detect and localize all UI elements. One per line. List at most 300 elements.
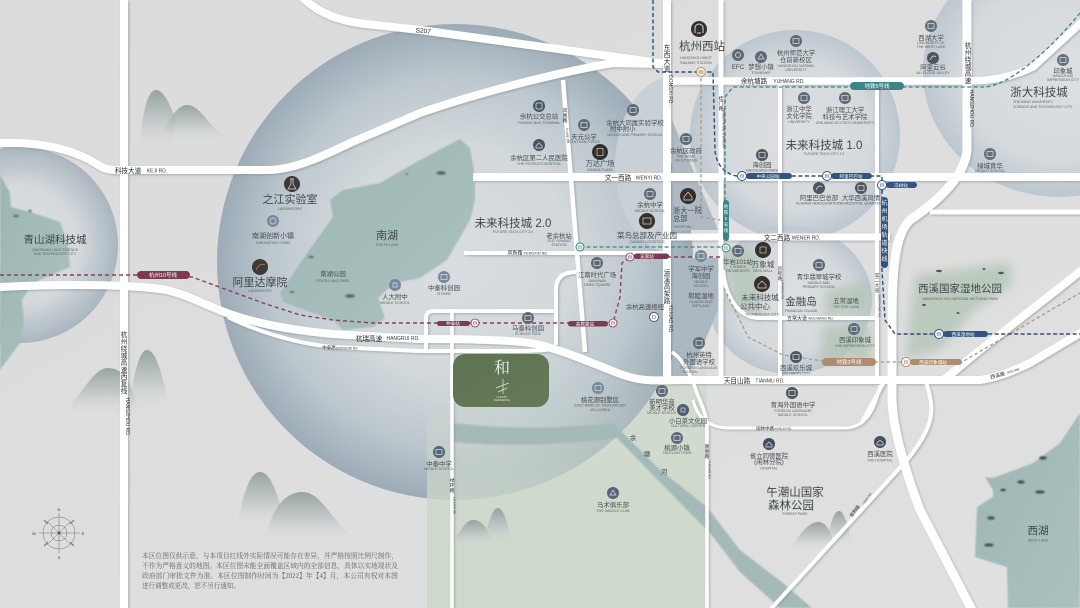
metro pills and stations: 5 (725, 216, 728, 221)
poi: Taoyuan town: TAOYUAN TOWN (663, 451, 692, 455)
poi: Qinghua Feicui school: 青华翡翠城学校 (797, 272, 842, 281)
road labels: 高 (664, 282, 671, 291)
poi: innovation town (252, 215, 294, 245)
poi: Zhijiang lab: LABORATORY (278, 207, 303, 211)
district: Zheda tech city (1010, 85, 1073, 109)
metro pills and stations: 高教路站 (576, 320, 595, 328)
poi: Zhejiang Sci-Tech college: ZHEJIANG SCI-TECH UNIVERSITY (816, 121, 875, 125)
project marker: LUXURY (496, 395, 508, 399)
poi: Ali cloud valley: 阿里云谷 (920, 62, 946, 72)
poi: Dahua Xixi: 大华西溪风情 (842, 193, 881, 202)
wetland patches (728, 250, 1012, 362)
poi: Renda middle school: 人大附中 (382, 292, 408, 301)
poi: Zhongtai science park: SI PARK (437, 292, 452, 296)
metro pills and stations: 地铁3号线 (836, 358, 862, 366)
poi: Xiaobaicai cultural park (669, 404, 707, 428)
road labels: HANGZHOU RD. (968, 90, 974, 128)
metro pills and stations: m (880, 183, 884, 189)
metro: teal dashed (580, 13, 1080, 247)
poi: Taohuayuan villas: EAST WING OF TAOHUAYUAN (574, 404, 626, 408)
label: South Lake: 南湖 (376, 229, 398, 242)
road labels: DONGXI RD. (667, 75, 673, 105)
poi: South Lake Park: 南湖公园 (320, 269, 346, 278)
poi: Xiaobaicai cultural park: CULTURAL CENTER (671, 424, 706, 428)
metro pills and stations: 线 (881, 255, 888, 263)
poi: Tongde hospital: 省立同德医院 (750, 451, 789, 460)
metro pills and stations: 杭 (881, 199, 888, 207)
poi: Zheda first hospital (673, 188, 702, 229)
metro pills and stations: 线 (724, 227, 729, 233)
road labels: 闲林中路 (756, 425, 774, 432)
poi: Datong experimental school: 余杭大同属实验学校 (606, 118, 664, 127)
road labels: 绕 (121, 344, 128, 353)
poi: Yuhai foreign language: MIDDLE SCHOOL (778, 413, 808, 417)
poi: Zhongtai science park: 中泰科创园 (428, 283, 460, 292)
district: Future Tech City 2.0: FUTURE TECH CITY 2.0 (493, 230, 533, 234)
label: Wuchaoshan forest park (766, 485, 824, 516)
road labels: 路 (664, 296, 671, 305)
road labels: 杭 (965, 41, 972, 50)
road labels: 西溪路 (989, 370, 1006, 381)
poi: Yuhang middle school: MIDDLE SCHOOL (635, 209, 665, 213)
poi: Alibaba headquarters (796, 182, 842, 206)
road labels: 路 (778, 275, 783, 282)
poi: Zhijiang lab: 之江实验室 (262, 192, 318, 206)
poi: Haichuang park (746, 149, 779, 172)
metro: blue dashed (653, 0, 1080, 334)
metro pills and stations: 阿里巴巴站 (840, 173, 863, 180)
road labels: 睦 (778, 270, 783, 276)
road labels: 杭 (121, 330, 128, 339)
poi: Datong experimental school: 附中附小 (610, 124, 636, 133)
disclaimer text: 不作为严格意义的地图。本区位图未能全面覆盖区域内的全部信息，具体以实地现状及 (142, 561, 398, 571)
metro pills and stations: 吴家站 (640, 253, 654, 260)
road labels: FUCHUN RD. (708, 461, 712, 479)
road labels: 西 (121, 373, 128, 381)
metro pills and stations: 州 (881, 208, 888, 215)
label: Wuchaoshan forest park: 森林公园 (768, 498, 814, 512)
poi: Yuhang high-speed hub (626, 302, 665, 322)
green forest area (427, 370, 707, 608)
metro pills and stations: 西溪湿地站 (952, 331, 975, 338)
project marker: RESIDENCE (494, 398, 510, 402)
road labels: FLAME RD. (565, 128, 570, 144)
road labels: 大 (664, 57, 671, 66)
poi: Hangzhou West station (679, 21, 725, 65)
poi: Dahua Xixi (840, 182, 882, 206)
poi: Saddle club: THE SADDLE CLUB (596, 509, 630, 513)
poi: Hangzhou West station: 杭州西站 (679, 39, 725, 53)
poi: Tianyuan school: TIANYUAN FORCE (568, 140, 600, 144)
road labels: 二 (875, 278, 880, 283)
poi: Hemu wetland: WETLAND (692, 304, 710, 308)
compass (32, 507, 85, 560)
poi: Yuhang bus terminal (518, 100, 560, 125)
road labels: 大 (875, 282, 880, 289)
poi: Wanda plaza: 万达广场 (586, 159, 614, 168)
poi: Zhejiang Chinese culture college: 文化学院 (786, 111, 812, 120)
metro pills and stations: 道 (881, 239, 888, 247)
road labels (115, 27, 1021, 519)
label: West Lake: 西湖 (1028, 525, 1048, 537)
poi: Huayan 101: 1 HOMES (730, 265, 747, 269)
poi: South Lake Park: SOUTH LAKE PARK (316, 279, 350, 283)
poi: Wanda plaza (586, 144, 614, 172)
label: Xixi wetland park: 西溪国家湿地公园 (918, 282, 1002, 295)
road labels: LVHUAN RD. (452, 497, 456, 515)
poi: EFC: EFC (732, 64, 745, 71)
road labels: XIXI RD. (1007, 367, 1021, 375)
road labels: 速 (965, 77, 972, 85)
poi: Cainiao headquarters: CAINIAO LOGISTICS (630, 240, 665, 244)
label: West Lake (1028, 525, 1049, 542)
project marker (453, 354, 549, 407)
poi: Qinghua Feicui school: MIDDLE AND (808, 281, 830, 285)
poi: Yuhai foreign language: 育海外国语中学 (771, 400, 816, 409)
poi: Greentown Yuhua: 绿城育华 (977, 161, 1003, 170)
road labels: HANGZHOU RD. (124, 398, 130, 436)
poi: Jiangnan times square: 江南时代广场 (578, 270, 616, 279)
road labels: 门 (719, 100, 724, 107)
poi: Tongde hospital: HOSPITAL (760, 466, 778, 470)
road labels: 凤 (563, 108, 568, 114)
poi: Huayan 101 (723, 245, 754, 273)
poi: Xuejun middle school: SCHOOL (693, 284, 709, 288)
poi: Xuejun middle school: MIDDLE (694, 280, 708, 284)
poi: Dream town: 梦想小镇 (748, 62, 774, 71)
road labels: WUCHANG RD. (808, 316, 834, 320)
poi: Yuhang government (670, 133, 703, 162)
poi: Impression city: 印象城 (1053, 66, 1073, 75)
poi: Foreign language school: FOREIGN LANGUAGE (680, 366, 718, 370)
poi: innovation town: 南湖创新小镇 (252, 231, 294, 240)
poi: South Lake Park (316, 269, 350, 283)
poi: Yuhang government: OF CITIZENS (675, 158, 698, 162)
poi: Zhejiang Sci-Tech college: 科技与艺术学院 (823, 112, 868, 121)
road labels: YUXIAO RD. (667, 305, 673, 333)
poi: Jiangnan times square: TIMES SQUARE (583, 283, 611, 287)
road labels: 东 (664, 43, 671, 52)
district: Zheda tech city: SCIENCE AND TECHNOLOGY CITY (1013, 105, 1073, 109)
metro pills and stations: 轨 (881, 231, 888, 239)
road labels: ZHONGTAI RD. (336, 346, 358, 350)
road labels: S207 (415, 27, 432, 36)
metro pills and stations: 杭州10号线 (149, 271, 178, 279)
poi: Old Yuhang station: STATION (551, 243, 567, 247)
poi: Future tech public center: 未来科技城 (741, 292, 779, 302)
poi: Future tech public center (740, 276, 780, 316)
mountains (60, 90, 852, 550)
poi: Xixi impression city: 西溪印象城 (839, 335, 872, 344)
metro pills and stations: m (698, 70, 704, 76)
poi: Dahua Xixi: HORIZONTAL QUARTER (840, 202, 882, 206)
label: West Lake: WEST LAKE (1028, 538, 1049, 542)
road labels: 线 (121, 386, 128, 395)
green fade over circle (427, 360, 707, 608)
poi: Wuchang wetland: THE FIVE LAND (833, 305, 860, 309)
district: Qingshan Lake: AND TECHNOLOGY CITY (34, 252, 77, 256)
poi: Impression city: HANGZHOU (1053, 74, 1074, 78)
poi: Huayan 101: 华岩101站 (723, 257, 754, 266)
road labels: GREEN ROAD STATION (722, 108, 726, 148)
poi: Renda middle school (380, 279, 410, 305)
poi: Datong experimental school: MIDDLE AND PRIMARY SCHOOL (607, 133, 663, 137)
district: Future Tech City 2.0: 未来科技城 2.0 (475, 216, 551, 230)
poi: Cainiao headquarters: 菜鸟总部及产业园 (617, 230, 677, 240)
poi: Hemu wetland: GUANGLONG (689, 300, 713, 304)
road labels: YUHANG RD. (773, 79, 805, 85)
metro pills and stations: 冯树站 (894, 182, 908, 189)
poi: Science park: 马秦科创园 (512, 324, 544, 332)
poi: Yuhai foreign language (771, 387, 816, 417)
lake: South Lake (280, 139, 475, 330)
poi: Zhongtai middle school: MIDDLE SCHOOL (424, 467, 454, 471)
poi: Science park (512, 312, 544, 336)
poi: Second people's hospital: 余杭区第二人民医院 (510, 153, 568, 162)
label: Xixi wetland park: HANGZHOU XIXI NATIONAL WETLAND PARK (922, 297, 999, 301)
poi: Tongde hospital (750, 438, 789, 470)
metro pills and stations: m (610, 321, 616, 327)
disclaimer text: 政府部门审批文件为准。本区位图制作时间为【2022】年【4】月，本公司有权对本图 (142, 571, 398, 581)
poi: Yuhang high-speed hub: 余杭高速枢纽 (626, 302, 665, 311)
district: Future Tech City 1.0: 未来科技城 1.0 (786, 138, 862, 152)
road labels: 凤新路 (507, 250, 523, 256)
poi: Xiaobaicai cultural park: 小白菜文化园 (669, 416, 707, 425)
metro line: gray-brown dashed (701, 78, 1080, 362)
road labels: 运 (664, 269, 671, 277)
poi: Zhejiang Sci-Tech college: 浙江理工大学 (826, 105, 865, 114)
road labels: 路 (719, 105, 724, 112)
metro pills and stations: m (724, 246, 728, 252)
poi: Mixc mall: 万象城 (752, 259, 775, 269)
poi: Zhejiang Chinese culture college: 浙江中华 (786, 104, 812, 113)
road labels: 架 (664, 290, 671, 298)
district: Qingshan Lake: 青山湖科技城 (24, 233, 87, 246)
poi: Normal university: UNIVERSITY (785, 68, 807, 72)
poi: Foreign language school: 外国语学校 (683, 357, 716, 366)
poi: Haichuang park: HAICHUANG PARK (746, 168, 779, 172)
road labels: XIANLIN RD. (774, 426, 792, 430)
poi: Mixc mall (752, 242, 775, 273)
district: Future Tech City 1.0: FUTURE TECH CITY 1.0 (804, 152, 844, 156)
road labels: WENYI RD. (636, 176, 662, 182)
poi: Impression city: IMPRESSION CITY (1047, 78, 1079, 82)
metro pills and stations: 地铁5号线 (864, 82, 890, 90)
road labels: 凰 (563, 113, 568, 119)
poi: Second people's hospital (510, 139, 568, 166)
poi: Science park: SCIENCE PARK (515, 332, 542, 336)
district: Zheda tech city: 浙大科技城 (1010, 85, 1068, 99)
river: 河 (661, 468, 668, 476)
road labels: KEJI RD. (147, 168, 167, 174)
poi: Xuejun middle school: 海创园 (691, 271, 711, 280)
poi: Xixi impression city: XIXI IMPRESSION CITY (835, 344, 875, 348)
metro pills and stations: m (824, 174, 830, 180)
poi: Normal university: 杭州师范大学 (777, 48, 816, 57)
road labels: 路 (450, 487, 455, 494)
road labels: 高 (965, 69, 972, 78)
river (453, 423, 812, 608)
poi: Zhejiang Chinese culture college (786, 92, 812, 124)
metro pills and stations: 中央公园站 (757, 173, 780, 180)
poi: Saddle club (596, 487, 630, 513)
poi: Xixi impression city (835, 323, 875, 348)
road labels: 春 (705, 448, 710, 455)
metro pills and stations: 西溪印象城站 (919, 359, 947, 366)
compass: W (32, 531, 36, 536)
label: Xixi wetland park (918, 268, 1004, 314)
poi: Foreign language school (680, 337, 718, 374)
poi: Zhongtai middle school (424, 446, 454, 471)
label: South Lake (376, 229, 399, 247)
poi: Saddle club: 马术俱乐部 (597, 500, 630, 509)
road labels: 路 (705, 453, 710, 460)
label: Wuchaoshan forest park: FOREST PARK (782, 512, 808, 516)
road labels: 文一西路 (605, 173, 632, 182)
metro pills and stations: m (578, 245, 582, 251)
poi: Yuhang bus terminal: YUHANG BUS TERMINAL (518, 121, 560, 125)
poi: Xuejun middle school (688, 250, 714, 288)
poi: Xixi hospital: 西溪医院 (867, 449, 893, 458)
road labels: 绕 (965, 55, 972, 64)
road labels: 州 (121, 339, 127, 346)
road labels: HANGRUI RD. (386, 336, 420, 342)
poi: Old Yuhang station: 老余杭站 (546, 231, 572, 240)
district: Qingshan Lake (24, 233, 87, 256)
poi: Hemu wetland (688, 291, 714, 308)
compass: S (58, 555, 61, 560)
road labels: LONG RD. (861, 491, 873, 505)
metro pills and stations: 地 (724, 203, 729, 209)
poi: EFC (732, 49, 745, 71)
road labels: 常 (875, 272, 880, 279)
metro pills and stations: 仲泰站 (446, 320, 460, 327)
district: Qingshan Lake: QINGSHAN LAKE SCIENCE (32, 248, 79, 252)
river: 塘 (644, 449, 651, 458)
poi: Taoyuan town (663, 432, 692, 455)
road labels: WENER RD. (792, 236, 820, 242)
poi: Xixi happy city: XIXI HAPPY CITY (781, 372, 811, 376)
poi: Greentown Yuhua (975, 148, 1005, 173)
road labels: 环 (450, 483, 455, 489)
poi: Zheda first hospital: 总部 (673, 214, 687, 223)
poi: Second people's hospital: THE PEOPLE'S HOSPITAL (517, 162, 561, 166)
metro pills and stations: m (936, 332, 942, 338)
road labels: 五常大道 (787, 315, 807, 322)
poi: Tianyuan school: 天元公学 (571, 132, 597, 141)
poi: Cainiao headquarters (617, 213, 677, 244)
poi: DAMO academy: 阿里达摩院 (232, 275, 288, 289)
metro pills and stations: m (472, 321, 478, 327)
road labels: TIANMU RD. (755, 378, 785, 384)
poi: Hemu wetland: 和睦湿地 (688, 291, 714, 300)
poi: Wanda plaza: WANDA PLAZA (587, 168, 613, 172)
district: Zheda tech city: ZHEJIANG UNIVERSITY (1013, 100, 1054, 104)
metro pills and stations: m (904, 360, 908, 366)
poi: Westlake university (917, 20, 946, 49)
poi: Greentown Yuhua: MIDDLE SCHOOL (975, 169, 1005, 173)
road labels: 道 (664, 64, 671, 73)
metro pills and stations: 快 (881, 247, 888, 255)
poi: Huayan 101: RESIDENCES (726, 269, 750, 273)
road labels: 富 (705, 443, 710, 450)
poi: Yuhang government: 余杭区政府 (670, 146, 703, 155)
poi: Wuchang wetland: 五常湿地 (833, 296, 859, 305)
district: Financial island: 金融岛 (785, 295, 817, 308)
poi: Xixi happy city: 西溪欢乐城 (780, 363, 813, 372)
road labels: 余杭塘路 (741, 76, 768, 86)
metro pills and stations (137, 68, 988, 366)
poi: Jiangnan times square: JIANGNAN (588, 279, 606, 283)
river: 余 (630, 433, 637, 442)
poi: Westlake university: 西湖大学 (918, 33, 944, 42)
poi: Renda middle school: MIDDLE SCHOOL (380, 301, 410, 305)
poi: Xixi hospital (867, 436, 893, 462)
road labels: 杭瑞高速 (356, 334, 383, 343)
road labels: 文二西路 (764, 233, 791, 242)
metro pills and stations: m (628, 255, 632, 261)
poi: Xixi happy city (780, 351, 813, 376)
poi: Wuchang wetland (833, 296, 860, 309)
poi: Normal university (777, 35, 816, 72)
poi: Taohuayuan villas: 桃花源别墅区 (581, 395, 620, 404)
road labels: 紫荆路 (848, 503, 862, 519)
road labels: 中泰路 (322, 344, 336, 351)
poi: Zhijiang lab (262, 176, 318, 211)
poi: Datong experimental school (606, 104, 664, 137)
poi: Zheda first hospital: HOSPITAL (674, 225, 692, 229)
road labels: 速 (121, 366, 128, 374)
poi: Ali cloud valley: ALI CLOUD VALLEY (916, 71, 950, 75)
road labels: JINGCHANG RD. (878, 294, 882, 318)
poi: Yuhang government: THE HOME (677, 154, 696, 158)
poi: Future tech public center: 公共中心 (740, 301, 770, 311)
road labels: 路 (563, 117, 568, 124)
metro pills and stations: m (740, 174, 744, 180)
poi: Xinminghua school (647, 385, 677, 415)
disclaimer text: 本区位图仅供示意，与本项目红线外实际情况可能存在差异，并严格按照比例尺制作， (142, 551, 398, 561)
road labels: 溪 (664, 275, 671, 284)
poi: innovation town: INNOVATION TOWN (256, 241, 290, 245)
poi: Yuhang middle school: 余杭中学 (637, 200, 663, 209)
poi: Normal university: 仓前新校区 (780, 55, 813, 64)
district: Future Tech City 2.0 (475, 216, 551, 234)
poi: Dream town (748, 51, 774, 75)
poi: Impression city (1047, 54, 1079, 82)
poi: Xinminghua school: 新明华音 (649, 397, 675, 406)
poi: Jiangnan times square (578, 257, 616, 287)
road labels: 州 (965, 50, 971, 57)
road labels: 科技大道 (115, 166, 142, 175)
poi: Qinghua Feicui school (797, 259, 842, 289)
road labels: 良 (778, 265, 783, 272)
label: Wuchaoshan forest park: 午潮山国家 (766, 485, 824, 499)
disclaimer text: 进行调整或更改，恕不另行通知。 (142, 581, 240, 591)
road labels: 城 (965, 63, 972, 71)
poi: Old Yuhang station: OLD YUHANG (547, 239, 571, 243)
poi: DAMO academy (232, 259, 288, 293)
poi: Ali cloud valley (916, 52, 950, 75)
poi: Hangzhou West station: RAILWAY STATION (680, 61, 712, 65)
poi: Alibaba headquarters: ALIBABA HEADQUARTERS (796, 202, 842, 206)
poi: Foreign language school: 杭州英特 (686, 350, 712, 359)
poi: Hangzhou West station: HANGZHOU WEST (680, 56, 713, 60)
road labels: 桂 (719, 95, 724, 102)
poi: Westlake university: THE WEST LAKE (917, 45, 946, 49)
poi: Dream town: TOWNSHIP (751, 71, 771, 75)
poi: Xinminghua school: 美才学校 (649, 403, 675, 412)
lake: Qingshan (0, 175, 70, 370)
